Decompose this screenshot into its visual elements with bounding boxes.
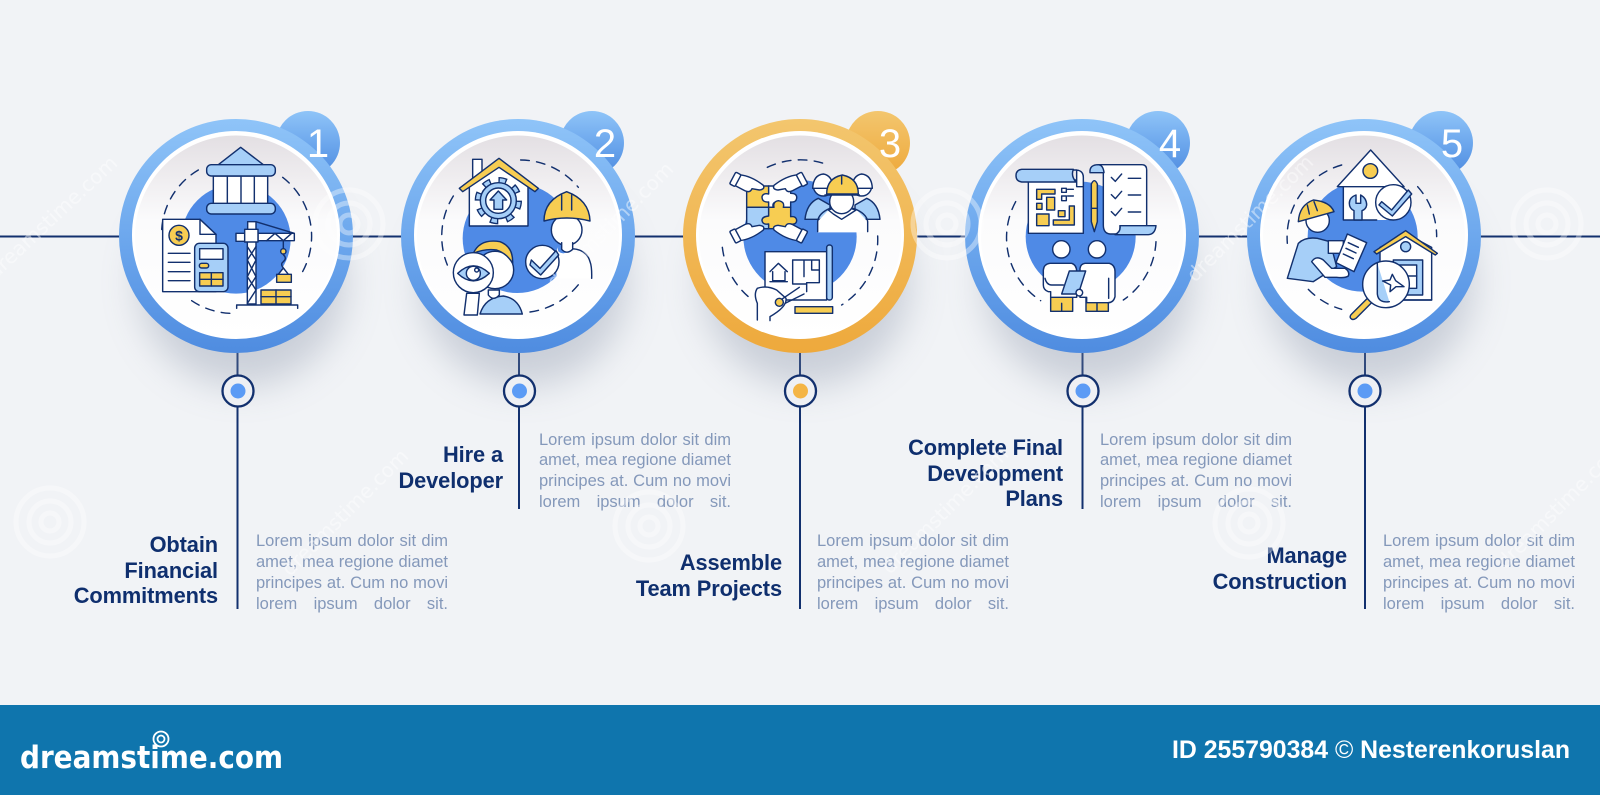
watermark overlay: dreamstime.com — [542, 157, 678, 294]
text block: step 5: lorem ipsum dolor sit. — [1383, 595, 1575, 613]
text block: step 5: amet, mea regione diamet — [1383, 553, 1575, 571]
image id and author: ID 255790384 © Nesterenkoruslan — [1172, 736, 1570, 764]
text block: step 3 — [817, 532, 1009, 613]
number badge 2 — [560, 111, 624, 175]
icon: bank, bill and crane — [162, 147, 312, 313]
text block: step 3: lorem ipsum dolor sit. — [817, 595, 1009, 613]
text block: step 4: principes at. Cum no movi — [1100, 472, 1292, 490]
watermark overlay — [0, 150, 1600, 581]
footer banner — [0, 705, 1600, 795]
heading: step 2: Developer — [398, 468, 503, 493]
text block: step 4 — [1100, 430, 1292, 511]
heading: step 1: Obtain — [150, 532, 218, 557]
icon: puzzle team and blueprint — [722, 160, 880, 321]
heading: step 4: Complete Final — [908, 435, 1063, 460]
icon: houses, inspector and magnifier — [1287, 150, 1437, 319]
heading: step 3 — [636, 550, 782, 601]
text block: step 3: amet, mea regione diamet — [817, 553, 1009, 571]
heading: step 2 — [398, 442, 504, 493]
heading: step 4 — [908, 435, 1063, 511]
text block: step 5: principes at. Cum no movi — [1383, 574, 1575, 592]
connector nodes — [222, 376, 1380, 406]
number badge 5 — [1409, 111, 1473, 175]
heading: step 1: Commitments — [74, 583, 218, 608]
step 2 circle: 2 — [594, 122, 616, 166]
text block: step 4: lorem ipsum dolor sit. — [1100, 493, 1292, 511]
number badge 4 — [1126, 111, 1190, 175]
text block: step 4: amet, mea regione diamet — [1100, 451, 1292, 469]
step 1 circle: 1 — [307, 122, 329, 166]
step 5 circle: 5 — [1441, 122, 1463, 166]
heading: step 4: Development — [927, 461, 1063, 486]
step 4 circle — [965, 111, 1199, 386]
step 1 circle — [119, 111, 353, 386]
icon: plans, checklist and two people — [1007, 165, 1156, 311]
text block: step 1: principes at. Cum no movi — [256, 574, 448, 592]
heading: step 3: Assemble — [680, 550, 782, 575]
step 4 circle: 4 — [1159, 122, 1181, 166]
number badge 1 — [276, 111, 340, 175]
timeline line — [0, 236, 1600, 238]
watermark overlay: dreamstime.com — [277, 444, 413, 581]
number badge 3 — [846, 111, 910, 175]
text block: step 2 — [539, 430, 731, 511]
heading: step 5: Manage — [1266, 543, 1347, 568]
text block: step 2: lorem ipsum dolor sit. — [539, 493, 731, 511]
step 3 circle: 3 — [879, 122, 901, 166]
text block: step 1: lorem ipsum dolor sit. — [256, 595, 448, 613]
logo spiral — [154, 732, 168, 746]
heading: step 5 — [1213, 543, 1347, 594]
icon: bank, bill and crane: $ — [175, 227, 183, 243]
heading: step 4: Plans — [1005, 486, 1063, 511]
watermark overlay: dreamstime.com — [1182, 150, 1318, 287]
step 2 circle — [401, 111, 635, 386]
heading: step 3: Team Projects — [636, 576, 782, 601]
logo text: dreamstime.com — [20, 740, 283, 776]
heading: step 5: Construction — [1213, 569, 1347, 594]
step 5 circle — [1247, 111, 1481, 386]
text block: step 2: principes at. Cum no movi — [539, 472, 731, 490]
heading: step 1: Financial — [124, 558, 218, 583]
text block: step 2: Lorem ipsum dolor sit dim — [539, 430, 731, 448]
text block: step 3: principes at. Cum no movi — [817, 574, 1009, 592]
text block: step 1: Lorem ipsum dolor sit dim — [256, 532, 448, 550]
text block: step 1 — [256, 532, 448, 613]
heading: step 1 — [74, 532, 218, 608]
watermark overlay: dreamstime.com — [877, 442, 1013, 579]
text block: step 4: Lorem ipsum dolor sit dim — [1100, 430, 1292, 448]
text block: step 2: amet, mea regione diamet — [539, 451, 731, 469]
icon: house, developer and inspector — [442, 158, 592, 315]
text block: step 1: amet, mea regione diamet — [256, 553, 448, 571]
text block: step 3: Lorem ipsum dolor sit dim — [817, 532, 1009, 550]
stem lines — [238, 350, 1365, 609]
step 3 circle — [683, 111, 917, 386]
text block: step 5 — [1383, 532, 1575, 613]
text block: step 5: Lorem ipsum dolor sit dim — [1383, 532, 1575, 550]
heading: step 2: Hire a — [443, 442, 503, 467]
